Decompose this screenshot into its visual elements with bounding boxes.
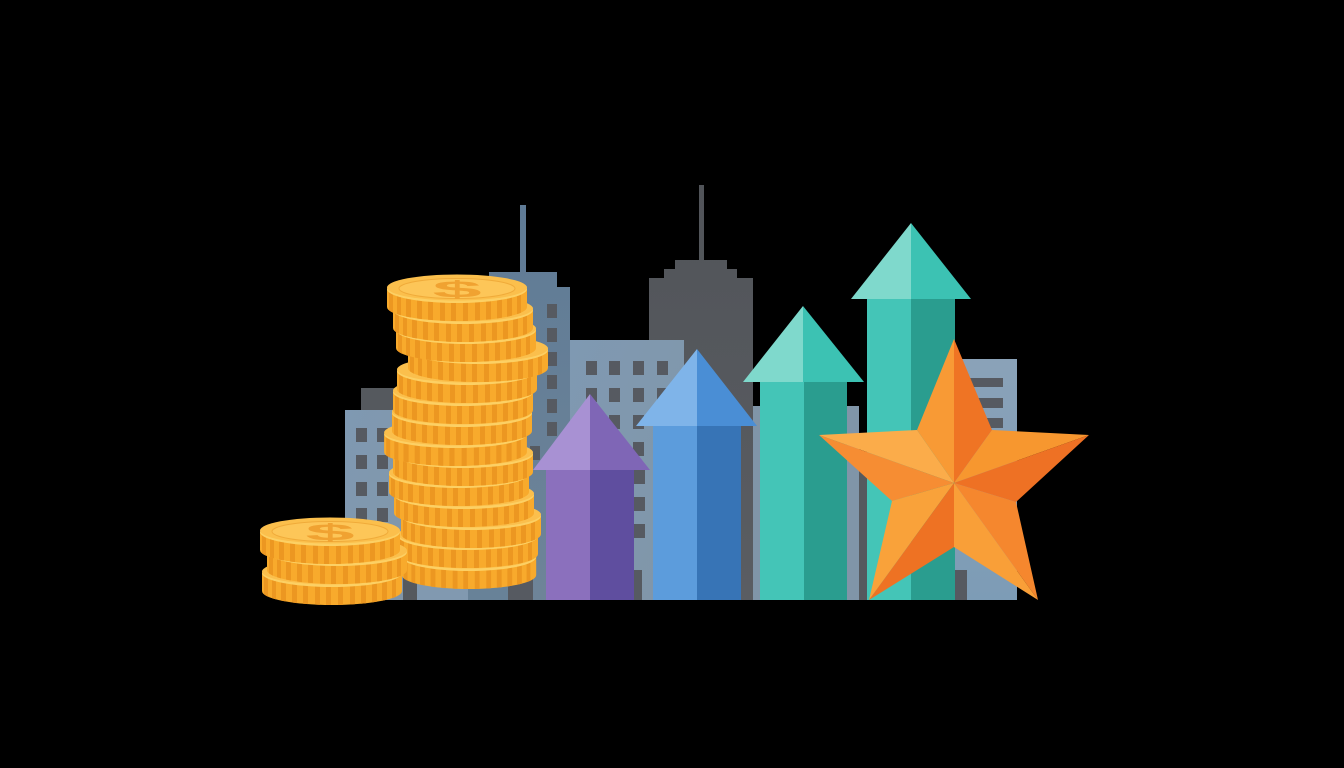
building: blue-grey tower with antenna: [489, 205, 570, 600]
building: small dark block at left: [361, 388, 406, 418]
arrow: purple: [533, 394, 650, 600]
building: far right block with wide windows: [950, 359, 1017, 600]
arrow: teal tall: [851, 223, 971, 600]
building: block behind teal arrow: [753, 406, 867, 600]
coin: top of short stack with dollar sign: $: [305, 520, 355, 545]
arrow: blue: [636, 349, 757, 600]
building: dark tower with antenna: [649, 185, 753, 600]
building: light left block with windows: [345, 410, 508, 600]
arrow: teal medium: [743, 306, 864, 600]
illustration: city skyline with coins, growth arrows and star: [260, 185, 1089, 605]
skyline buildings: [345, 185, 1017, 600]
icon: faceted orange star: [819, 339, 1089, 600]
coin: top of tall stack with dollar sign: $: [432, 277, 482, 302]
coin: top of short stack with dollar sign: [260, 518, 400, 568]
coin: top of tall stack with dollar sign: [387, 274, 527, 325]
coins: short stack: [260, 518, 407, 609]
building: centre block with window grid: [570, 340, 684, 600]
coins: tall stack: [384, 274, 548, 593]
